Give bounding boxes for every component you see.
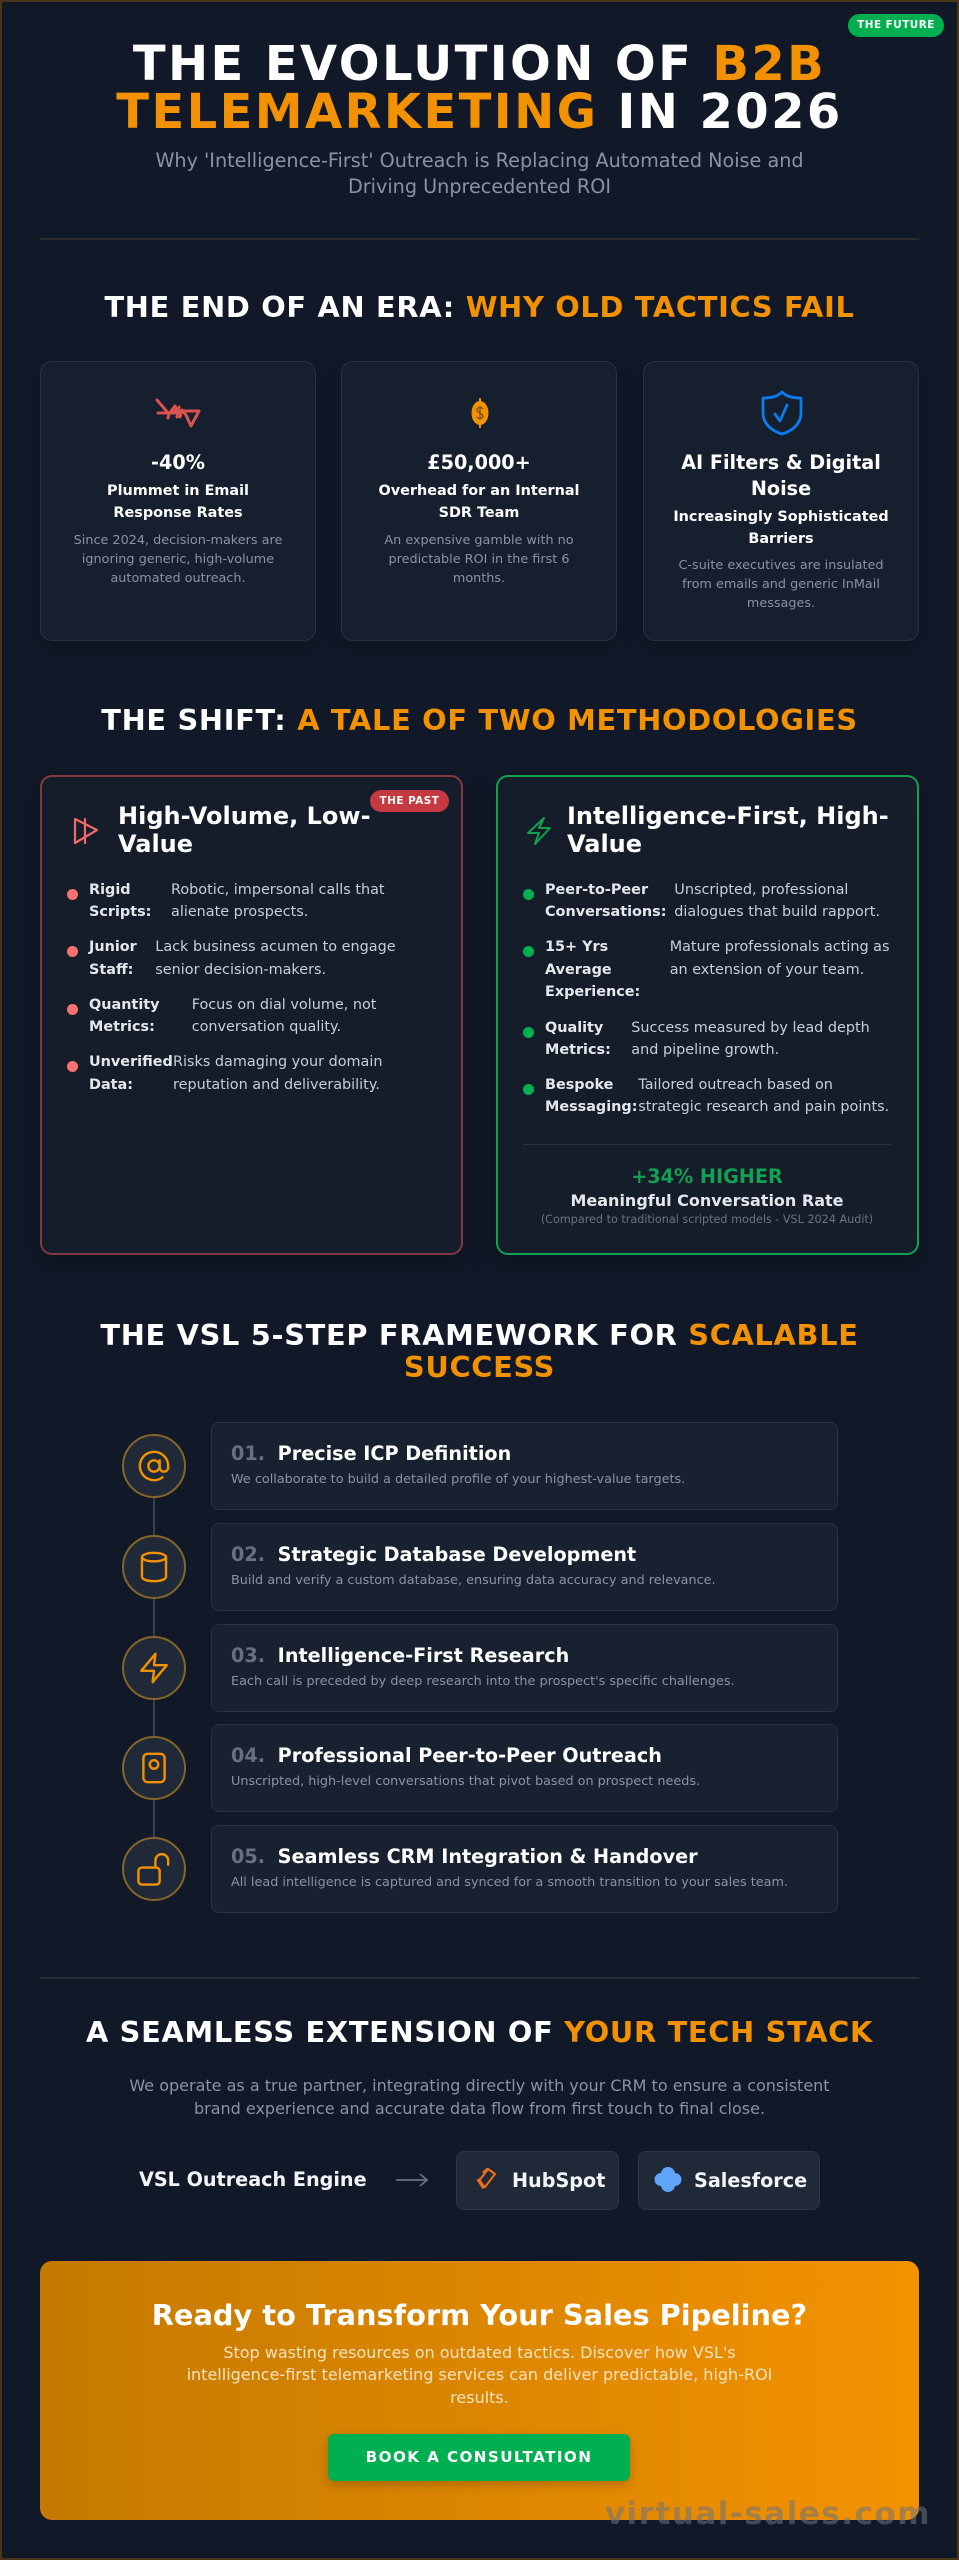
item: Metrics: xyxy=(89,1019,155,1035)
badge: the past: THE PAST xyxy=(380,795,439,807)
icon: trending down xyxy=(155,398,201,428)
step description: Unscripted, high-level conversations that pivot based on prospect needs. xyxy=(231,1774,700,1789)
title: THE EVOLUTION OF B2B xyxy=(133,36,826,92)
paragraph: tech stack: brand experience and accurate data flow from first touch to final close. xyxy=(194,2099,765,2118)
step 3 xyxy=(211,1624,838,1712)
item: and pipeline growth. xyxy=(631,1042,779,1058)
card: AI filters xyxy=(643,361,919,641)
item: Quality xyxy=(545,1020,603,1036)
item xyxy=(67,997,376,1035)
cta text: intelligence-first telemarketing services can deliver predictable, high-ROI xyxy=(187,2365,772,2384)
stat label: Response Rates xyxy=(113,505,243,521)
card: SDR overhead xyxy=(341,361,617,641)
panel: the future xyxy=(496,775,919,1255)
stat description: predictable ROI in the first 6 xyxy=(388,552,570,567)
item: Scripts: xyxy=(89,904,151,920)
stat description: Since 2024, decision-makers are xyxy=(74,533,282,548)
icon: dollar xyxy=(472,398,488,428)
item: Bespoke xyxy=(545,1077,613,1093)
step 1 xyxy=(211,1422,838,1510)
heading: the end of an era: THE END OF AN ERA: WHY OLD TACTICS FAIL xyxy=(104,290,855,324)
cta text: results. xyxy=(450,2388,509,2407)
item xyxy=(523,882,880,920)
step title: 05. Seamless CRM Integration & Handover xyxy=(231,1845,698,1868)
footnote: (Compared to traditional scripted models - VSL 2024 Audit) xyxy=(541,1213,873,1226)
card: email response rates xyxy=(40,361,316,641)
step title: 02. Strategic Database Development xyxy=(231,1543,636,1566)
cta text xyxy=(187,2343,772,2407)
item xyxy=(523,1020,870,1058)
item: an extension of your team. xyxy=(670,962,864,978)
stat: +34% higher: +34% HIGHER xyxy=(631,1165,783,1188)
badge: the future: THE FUTURE xyxy=(857,19,935,31)
icon: hubspot xyxy=(476,2168,496,2189)
stat: AI filters: AI Filters & Digital xyxy=(681,451,881,474)
stat label: Overhead for an Internal xyxy=(379,483,579,499)
badge: the future xyxy=(848,14,944,37)
item xyxy=(523,1077,889,1115)
item: Tailored outreach based on xyxy=(638,1077,833,1093)
icon: salesforce xyxy=(654,2167,682,2192)
stat label: Meaningful Conversation Rate xyxy=(570,1191,844,1210)
item: Rigid xyxy=(89,882,131,898)
item: reputation and deliverability. xyxy=(173,1077,380,1093)
icon: step 5 open lock xyxy=(122,1837,186,1901)
stat label: SDR Team xyxy=(439,505,519,521)
item: Unscripted, professional xyxy=(674,882,848,898)
badge: the past xyxy=(370,790,449,812)
heading: framework: SUCCESS xyxy=(404,1350,555,1384)
cta button: BOOK A CONSULTATION xyxy=(366,2448,592,2466)
step 4 xyxy=(211,1724,838,1812)
panel: call to action xyxy=(40,2261,919,2520)
item: Experience: xyxy=(545,984,640,1000)
item: Risks damaging your domain xyxy=(173,1054,382,1070)
heading: Value xyxy=(118,830,193,858)
item: conversation quality. xyxy=(192,1019,341,1035)
item: 15+ Yrs xyxy=(545,939,608,955)
item: senior decision-makers. xyxy=(155,962,326,978)
item: Success measured by lead depth xyxy=(631,1020,870,1036)
stat: AI filters xyxy=(681,451,881,500)
item xyxy=(523,939,890,1000)
item: strategic research and pain points. xyxy=(638,1099,889,1115)
icon: step 1 at sign xyxy=(122,1434,186,1498)
item xyxy=(67,1054,382,1093)
paragraph: tech stack: We operate as a true partner, integrating directly with your CRM to ensure a consistent xyxy=(129,2076,830,2095)
stat description: from emails and generic InMail xyxy=(682,577,880,592)
subtitle: Driving Unprecedented ROI xyxy=(348,175,611,198)
step title: 03. Intelligence-First Research xyxy=(231,1644,569,1667)
item: Lack business acumen to engage xyxy=(155,939,396,955)
stat: AI filters: Noise xyxy=(751,477,811,500)
panel: the past xyxy=(40,775,463,1255)
item xyxy=(67,882,385,920)
icon: shield check xyxy=(762,390,802,436)
item: Mature professionals acting as xyxy=(670,939,890,955)
logo: hubspot xyxy=(456,2151,619,2210)
heading: framework xyxy=(100,1318,859,1384)
step title: 01. Precise ICP Definition xyxy=(231,1442,511,1465)
item: Staff: xyxy=(89,962,133,978)
stat description: C-suite executives are insulated xyxy=(678,558,884,573)
item: dialogues that build rapport. xyxy=(674,904,880,920)
stat description: messages. xyxy=(747,596,815,611)
stat description: months. xyxy=(453,571,505,586)
item: Peer-to-Peer xyxy=(545,882,648,898)
title xyxy=(116,36,843,140)
heading: Intelligence-First, High- xyxy=(567,802,889,830)
step description: We collaborate to build a detailed profile of your highest-value targets. xyxy=(231,1472,685,1487)
heading: framework: THE VSL 5-STEP FRAMEWORK FOR SCALABLE xyxy=(100,1318,859,1352)
stat description xyxy=(74,533,282,586)
stat description: An expensive gamble with no xyxy=(384,533,574,548)
subtitle: Why 'Intelligence-First' Outreach is Replacing Automated Noise and xyxy=(155,149,804,172)
stat description xyxy=(384,533,574,586)
stat label: Increasingly Sophisticated xyxy=(673,509,889,525)
step 2 xyxy=(211,1523,838,1611)
item: Messaging: xyxy=(545,1099,637,1115)
step description: Build and verify a custom database, ensuring data accuracy and relevance. xyxy=(231,1573,716,1588)
heading: High-Volume, Low- xyxy=(118,802,371,830)
stat description: automated outreach. xyxy=(110,571,246,586)
step 5 xyxy=(211,1825,838,1913)
item: Quantity xyxy=(89,997,160,1013)
item: Conversations: xyxy=(545,904,666,920)
item: Average xyxy=(545,962,612,978)
paragraph: tech stack xyxy=(129,2076,830,2118)
item: Junior xyxy=(89,939,137,955)
item: alienate prospects. xyxy=(171,904,308,920)
stat label xyxy=(673,509,889,547)
icon: step 2 database xyxy=(122,1535,186,1599)
item: Data: xyxy=(89,1077,133,1093)
heading: Value xyxy=(567,830,642,858)
stat: £50,000+: £50,000+ xyxy=(427,451,531,474)
stat label: Barriers xyxy=(748,531,814,547)
watermark: virtual-sales.com xyxy=(605,2496,931,2532)
stat description: ignoring generic, high-volume xyxy=(82,552,274,567)
cta heading: Ready to Transform Your Sales Pipeline? xyxy=(152,2298,807,2332)
arrow xyxy=(396,2174,428,2186)
step title: 04. Professional Peer-to-Peer Outreach xyxy=(231,1744,662,1767)
icon: step 3 bolt xyxy=(122,1636,186,1700)
stat label xyxy=(107,483,249,521)
icon: bolt xyxy=(527,817,551,845)
item xyxy=(67,939,396,978)
logo: salesforce xyxy=(638,2151,820,2210)
stat label xyxy=(379,483,579,521)
item: Focus on dial volume, not xyxy=(192,997,376,1013)
cta button xyxy=(328,2434,630,2481)
item: Robotic, impersonal calls that xyxy=(171,882,385,898)
name: HubSpot xyxy=(512,2169,605,2192)
icon: step 4 speaker xyxy=(122,1736,186,1800)
subtitle xyxy=(155,149,804,198)
heading: tech stack: A SEAMLESS EXTENSION OF YOUR TECH STACK xyxy=(86,2015,873,2049)
label: VSL engine: VSL Outreach Engine xyxy=(139,2168,367,2191)
item: Metrics: xyxy=(545,1042,611,1058)
stat description xyxy=(678,558,884,611)
step description: Each call is preceded by deep research into the prospect's specific challenges. xyxy=(231,1674,735,1689)
stat: -40%: -40% xyxy=(151,451,205,474)
stat label: Plummet in Email xyxy=(107,483,249,499)
heading xyxy=(567,802,889,858)
heading: the shift: THE SHIFT: A TALE OF TWO METHODOLOGIES xyxy=(101,703,858,737)
cta text: Stop wasting resources on outdated tactics. Discover how VSL's xyxy=(223,2343,736,2362)
icon: play xyxy=(74,818,98,844)
heading xyxy=(118,802,371,858)
name: Salesforce xyxy=(694,2169,807,2192)
item: Unverified xyxy=(89,1054,173,1070)
title: TELEMARKETING IN 2026 xyxy=(116,84,843,140)
step description: All lead intelligence is captured and synced for a smooth transition to your sales team. xyxy=(231,1875,788,1890)
